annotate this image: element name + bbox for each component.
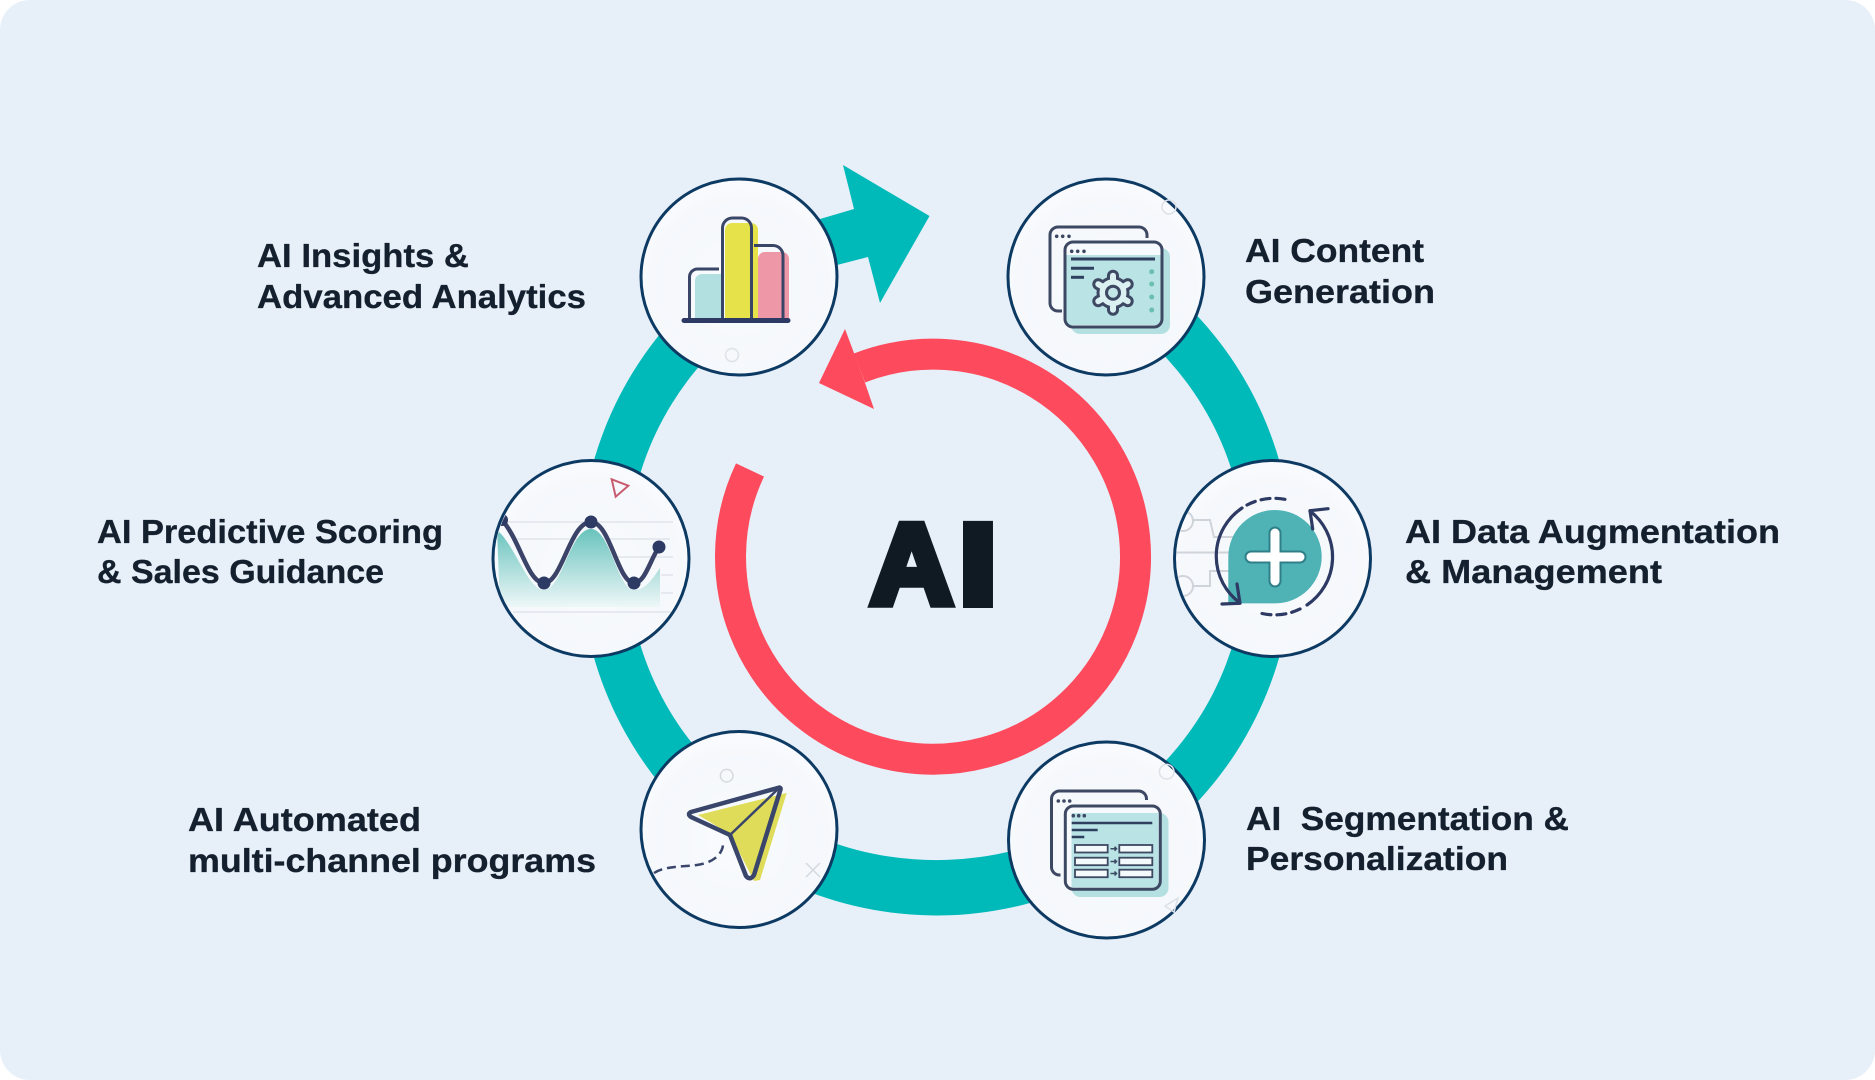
teal arrow	[820, 165, 930, 303]
label: AI Automated multi-channel programs	[188, 801, 596, 879]
icon: line chart	[496, 514, 673, 612]
label: AI Insights & Advanced Analytics: AI Insights &	[257, 237, 469, 274]
label: AI Content Generation	[1245, 232, 1435, 310]
label: AI Data Augmentation & Management: AI Data Augmentation	[1405, 513, 1780, 550]
red circular arrow	[731, 329, 1136, 759]
icon: small triangle	[612, 479, 628, 497]
center AI title	[870, 501, 997, 629]
label: AI Segmentation & Personalization	[1246, 800, 1569, 877]
node: AI Predictive Scoring & Sales Guidance	[493, 460, 689, 656]
icon: paper plane	[654, 788, 787, 881]
center AI title: I	[958, 501, 997, 629]
label: AI Content Generation: AI Content	[1245, 232, 1424, 269]
label: AI Predictive Scoring & Sales Guidance: & Sales Guidance	[97, 553, 384, 590]
icon: gear	[1096, 276, 1130, 310]
label: AI Predictive Scoring & Sales Guidance: AI Predictive Scoring	[97, 513, 443, 550]
teal cycle ring	[580, 253, 1293, 915]
label: AI Segmentation & Personalization: AI Segmentation &	[1246, 800, 1569, 837]
icon: bar chart	[684, 218, 789, 320]
icon: data bubble with plus	[1228, 510, 1322, 603]
node: AI Automated multi-channel programs	[641, 732, 837, 928]
icon: windows with table	[1052, 791, 1168, 897]
node: AI Insights & Advanced Analytics	[641, 179, 837, 375]
label: AI Data Augmentation & Management	[1405, 513, 1780, 590]
icon: windows with gear	[1050, 227, 1170, 334]
label: AI Automated multi-channel programs: AI Automated	[188, 801, 421, 838]
label: AI Data Augmentation & Management: & Management	[1405, 553, 1662, 590]
node: AI Segmentation & Personalization	[1008, 742, 1204, 938]
label: AI Predictive Scoring & Sales Guidance	[97, 513, 443, 590]
icon: cycle arrows	[1216, 498, 1333, 615]
node: AI Data Augmentation & Management	[1173, 460, 1370, 656]
label: AI Content Generation: Generation	[1245, 273, 1435, 310]
node: AI Content Generation	[1008, 179, 1204, 375]
label: AI Segmentation & Personalization: Personalization	[1246, 840, 1508, 877]
label: AI Insights & Advanced Analytics: Advanced Analytics	[257, 278, 586, 315]
label: AI Automated multi-channel programs: multi-channel programs	[188, 842, 596, 879]
icon: circuit lines	[1173, 511, 1235, 596]
center AI title: A	[870, 502, 953, 628]
label: AI Insights & Advanced Analytics	[257, 237, 586, 315]
